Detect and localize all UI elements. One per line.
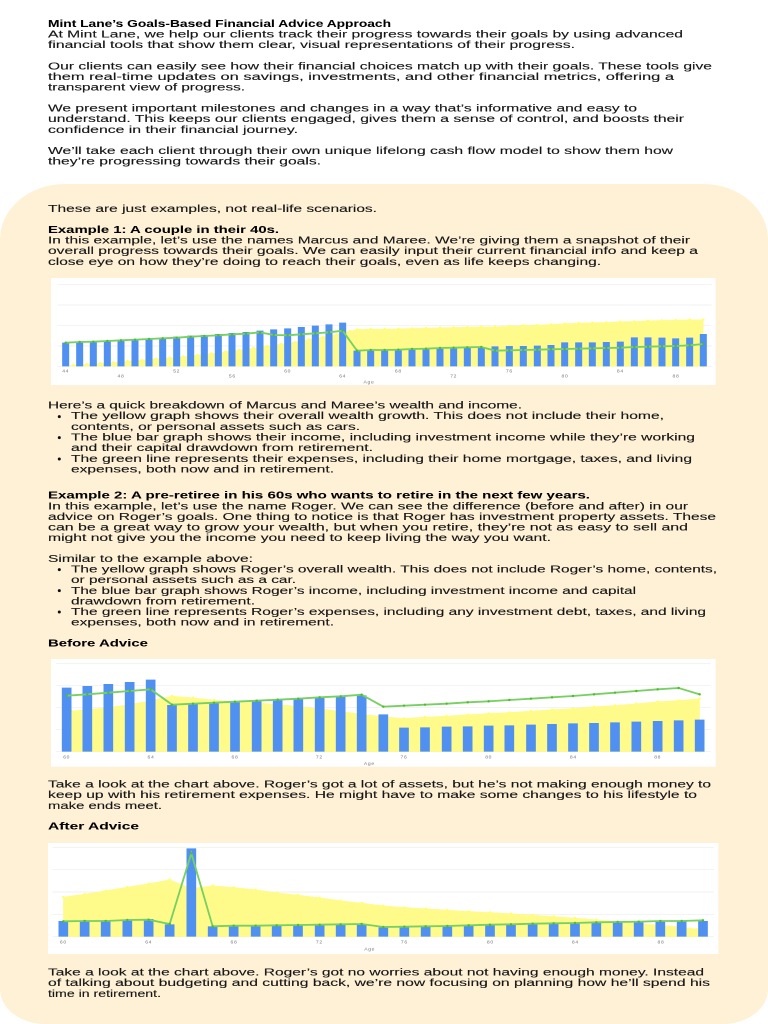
- example 1 breakdown list: The yellow graph shows their overall wealth growth. This does not include their home,: [71, 411, 664, 422]
- after advice commentary: [48, 968, 710, 1000]
- after advice commentary: of talking about budgeting and cutting back, we’re now focusing on planning how he’ll spend his: [48, 978, 710, 989]
- example 2 text: [48, 491, 717, 544]
- example 1 text: In this example, let’s use the names Marcus and Maree. We’re giving them a snapshot of their: [48, 236, 691, 247]
- intro text block: Our clients can easily see how their financial choices match up with their goals. These tools give: [48, 61, 713, 72]
- intro text block: [48, 19, 713, 167]
- age axis labels: 44: [62, 369, 69, 375]
- before advice commentary: [48, 780, 712, 812]
- examples disclaimer: These are just examples, not real-life scenarios.: [48, 204, 377, 215]
- age axis labels: [60, 940, 664, 952]
- age axis labels: 64: [148, 754, 154, 760]
- age axis labels: 56: [229, 373, 236, 379]
- green expenses line: [66, 331, 703, 351]
- chart: Roger before advice: [51, 659, 716, 767]
- age axis labels: 48: [118, 373, 124, 379]
- yellow wealth area: [63, 880, 703, 937]
- age axis labels: 76: [401, 940, 408, 946]
- age axis labels: 84: [617, 369, 624, 375]
- age axis labels: 60: [284, 369, 291, 375]
- example 2 text: advice on Roger’s goals. One thing to notice is that Roger has investment property assets. These: [48, 512, 717, 523]
- example 2 list: expenses, both now and in retirement.: [71, 618, 334, 629]
- age axis labels: 64: [145, 940, 152, 946]
- intro text block: confidence in their financial journey.: [48, 125, 298, 136]
- example 2 list: drawdown from retirement.: [71, 596, 255, 607]
- intro text block: We present important milestones and changes in a way that’s informative and easy to: [48, 104, 638, 115]
- example 1 breakdown list: Here’s a quick breakdown of Marcus and Maree’s wealth and income.: [48, 401, 522, 412]
- before advice commentary: keep up with his retirement expenses. He might have to make some changes to his lifestyle to: [48, 790, 698, 801]
- example 2 list: The yellow graph shows Roger’s overall wealth. This does not include Roger’s home, contents,: [71, 565, 717, 576]
- age axis labels: 76: [401, 754, 407, 760]
- example 1 breakdown list: The green line represents their expenses, including their home mortgage, taxes, and living: [71, 454, 692, 465]
- age axis labels: [62, 369, 679, 386]
- example 1 text: [48, 225, 699, 268]
- age axis labels: 76: [506, 369, 513, 375]
- yellow wealth area: [66, 320, 703, 366]
- after advice heading: After Advice: [48, 822, 140, 833]
- example 2 text: might not give you the income you need to keep living the way you want.: [48, 533, 551, 544]
- example 1 breakdown list: The blue bar graph shows their income, including investment income while they’re working: [71, 433, 695, 444]
- example 2 heading: Example 2: A pre-retiree in his 60s who wants to retire in the next few years.: [48, 491, 590, 502]
- age axis labels: Age: [364, 761, 375, 767]
- before advice commentary: Take a look at the chart above. Roger’s got a lot of assets, but he’s not making enough money to: [48, 780, 712, 791]
- age axis labels: 72: [316, 940, 323, 946]
- age axis labels: 88: [654, 754, 661, 760]
- age axis labels: 72: [450, 373, 457, 379]
- age axis labels: 88: [658, 940, 664, 946]
- chart: Marcus and Maree wealth, income and expenses by age: [51, 278, 716, 386]
- intro text block: understand. This keeps our clients engaged, gives them a sense of control, and boosts their: [48, 114, 685, 125]
- age axis labels: 52: [173, 369, 180, 375]
- age axis labels: Age: [364, 946, 375, 952]
- blue income bars: [66, 323, 703, 366]
- example 2 list: Similar to the example above:: [48, 554, 253, 565]
- after advice commentary: Take a look at the chart above. Roger’s got no worries about not having enough money. Instead: [48, 968, 704, 979]
- example 2 list: The green line represents Roger’s expenses, including any investment debt, taxes, and living: [71, 607, 706, 618]
- age axis labels: 88: [673, 373, 679, 379]
- intro text block: We’ll take each client through their own unique lifelong cash flow model to show them how: [48, 146, 674, 157]
- age axis labels: Age: [364, 380, 374, 386]
- intro text block: transparent view of progress.: [48, 83, 245, 94]
- before advice heading: Before Advice: [48, 639, 149, 650]
- age axis labels: 84: [570, 754, 577, 760]
- age axis labels: 84: [572, 940, 579, 946]
- age axis labels: 68: [232, 754, 238, 760]
- example 2 list: or personal assets such as a car.: [71, 575, 296, 586]
- green expenses line: [63, 853, 703, 927]
- intro text block: they’re progressing towards their goals.: [48, 156, 321, 167]
- example 2 text: can be a great way to grow your wealth, but when you retire, they’re not as easy to sell and: [48, 523, 688, 534]
- blue income bars: [63, 848, 703, 937]
- example 1 breakdown list: and their capital drawdown from retirement.: [71, 443, 373, 454]
- example 1 heading: Example 1: A couple in their 40s.: [48, 225, 279, 236]
- intro text block: them real-time updates on savings, investments, and other financial metrics, offering a: [48, 72, 675, 83]
- yellow wealth area: [72, 696, 700, 752]
- age axis labels: 80: [562, 373, 568, 379]
- intro text block: financial tools that show them clear, visual representations of their progress.: [48, 40, 575, 51]
- age axis labels: 60: [63, 754, 70, 760]
- age axis labels: 60: [60, 940, 67, 946]
- blue income bars: [67, 680, 700, 752]
- example 1 breakdown list: contents, or personal assets such as cars.: [71, 422, 360, 433]
- example 2 list: [48, 554, 717, 629]
- age axis labels: 80: [485, 754, 492, 760]
- example 2 text: In this example, let’s use the name Roger. We can see the difference (before and after) in our: [48, 501, 689, 512]
- chart: Roger after advice: [48, 843, 718, 954]
- green expenses line: [67, 688, 700, 707]
- age axis labels: 68: [231, 940, 237, 946]
- age axis labels: 68: [395, 369, 402, 375]
- intro heading: Mint Lane’s Goals-Based Financial Advice Approach: [48, 19, 391, 30]
- age axis labels: 64: [339, 373, 346, 379]
- example 1 breakdown list: [48, 401, 695, 475]
- example 2 list: The blue bar graph shows Roger’s income, including investment income and capital: [71, 586, 636, 597]
- age axis labels: 80: [487, 940, 494, 946]
- intro text block: At Mint Lane, we help our clients track their progress towards their goals by using advanced: [48, 30, 683, 41]
- age axis labels: [63, 754, 661, 767]
- before advice commentary: make ends meet.: [48, 801, 162, 812]
- after advice commentary: time in retirement.: [48, 989, 161, 1000]
- example 1 text: close eye on how they’re doing to reach their goals, even as life keeps changing.: [48, 257, 601, 268]
- age axis labels: 72: [316, 754, 323, 760]
- example 1 text: overall progress towards their goals. We can easily input their current financial info and keep a: [48, 246, 699, 257]
- example 1 breakdown list: expenses, both now and in retirement.: [71, 464, 334, 475]
